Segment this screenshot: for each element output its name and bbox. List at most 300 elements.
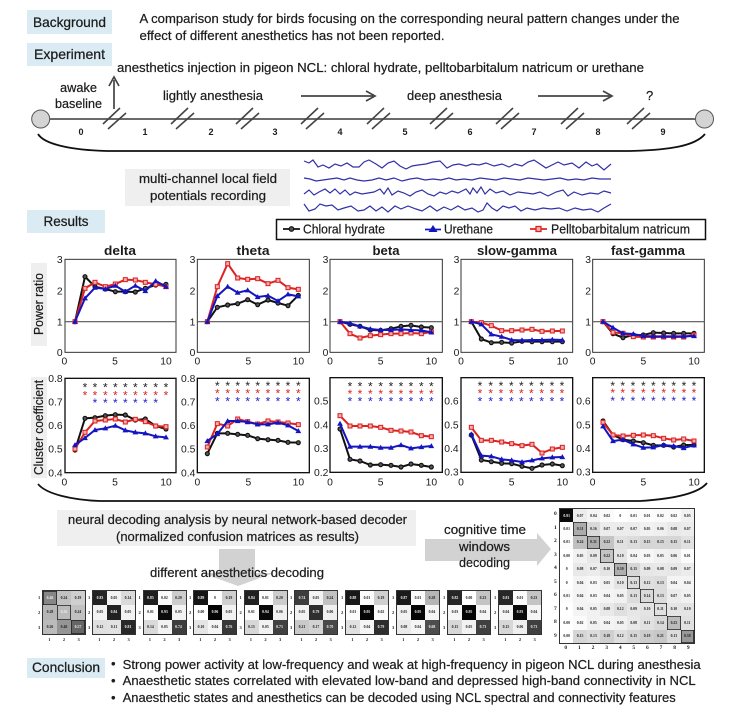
- arrow: injection up arrow: [109, 77, 119, 109]
- timeline: [32, 80, 713, 137]
- text block: conclusions: •: [111, 673, 116, 688]
- heading: Experiment: Experiment: [34, 46, 105, 62]
- heading: Background: Background: [33, 14, 106, 30]
- confusion matrix 3: 3: [178, 637, 180, 642]
- band titles: [104, 243, 686, 258]
- band titles: fast-gamma: [611, 243, 686, 258]
- confusion matrix 6: 1: [290, 595, 292, 600]
- band titles: delta: [104, 243, 137, 258]
- chart: beta cluster: *********: [348, 395, 434, 409]
- text block: injection: anesthetics injection in pigeon NCL: chloral hydrate, pelltobarbitalum natricum or urethane: [117, 60, 644, 75]
- band titles: slow-gamma: [477, 243, 558, 258]
- confusion matrix: cognitive time windows: 0.15: [657, 540, 664, 544]
- confusion matrix 8: 0.87: [401, 596, 407, 600]
- confusion matrix: cognitive time windows: 0.02: [577, 621, 583, 625]
- confusion matrix 3: 0.20: [175, 596, 182, 600]
- confusion matrix: cognitive time windows: 0.05: [590, 607, 597, 611]
- confusion matrix: cognitive time windows: 0.13: [657, 594, 664, 598]
- confusion matrix 10: 0.04: [503, 610, 509, 614]
- confusion matrix 2: 0.05: [125, 610, 131, 614]
- confusion matrix 9: 0.95: [466, 610, 472, 614]
- label: cognitive time windows decoding: cognitive time: [444, 522, 526, 537]
- confusion matrix: cognitive time windows: 0.07: [684, 567, 691, 571]
- chart: beta power: 0: [323, 348, 329, 359]
- confusion matrix: cognitive time windows: 0.10: [684, 607, 691, 611]
- time window numbers: 2: [208, 127, 214, 137]
- confusion matrix 5: 2: [240, 610, 242, 615]
- confusion matrix: cognitive time windows: 0.00: [563, 634, 570, 638]
- y label: power ratio: [31, 263, 47, 346]
- confusion matrix: cognitive time windows: 0.30: [617, 567, 624, 571]
- chart: theta cluster: *********: [215, 395, 301, 409]
- confusion matrix 1: 0.19: [75, 596, 81, 600]
- confusion matrix 1: 0.26: [61, 610, 67, 614]
- confusion matrix: cognitive time windows: 5: [632, 645, 635, 651]
- chart: slow-gamma cluster: *********: [478, 387, 565, 401]
- chart: power ratio beta, slow and fast gamma: [323, 255, 704, 367]
- confusion matrix: cognitive time windows: 0.05: [644, 527, 650, 531]
- confusion matrix 1: 2: [38, 610, 40, 615]
- label: question mark: ?: [646, 88, 653, 103]
- chart: fast-gamma cluster: 5: [640, 477, 646, 488]
- confusion matrix: cognitive time windows: 0.04: [577, 581, 583, 585]
- chart: slow-gamma cluster: *********: [478, 395, 565, 409]
- confusion matrix: cognitive time windows: 6: [646, 645, 649, 651]
- confusion matrix 4: 0.10: [198, 625, 204, 629]
- confusion matrix 3: 3: [138, 625, 141, 630]
- confusion matrix 1: 0.24: [75, 610, 81, 614]
- confusion matrix 8: 0.08: [401, 625, 407, 629]
- time window numbers: 3: [272, 127, 278, 137]
- confusion matrix 8: 0.68: [429, 625, 435, 629]
- confusion matrix: cognitive time windows: 0.04: [577, 594, 583, 598]
- confusion matrix 4: 0.00: [198, 610, 204, 614]
- chart: delta cluster: *********: [83, 388, 169, 402]
- confusion matrix: cognitive time windows: 0.04: [577, 607, 583, 611]
- confusion matrix 5: 0.84: [248, 596, 255, 600]
- chart: delta power: 5: [112, 356, 118, 367]
- confusion matrix: cognitive time windows: 0.07: [617, 527, 624, 531]
- confusion matrix: cognitive time windows: 0.04: [604, 621, 610, 625]
- confusion matrix: cognitive time windows: 0.10: [617, 581, 624, 585]
- chart: beta power: [323, 255, 442, 367]
- chart: delta power: 1: [57, 317, 63, 328]
- chart: theta cluster: 10: [293, 477, 304, 488]
- confusion matrix 4: 0.89: [198, 596, 204, 600]
- confusion matrix 10: 0.81: [503, 596, 509, 600]
- confusion matrix: cognitive time windows: 0.07: [590, 567, 597, 571]
- confusion matrix 8: 0.95: [415, 610, 421, 614]
- confusion matrix 5: [240, 590, 288, 642]
- chart: cluster coefficient delta and theta: [48, 374, 309, 488]
- time window numbers: [78, 127, 666, 137]
- confusion matrix: cognitive time windows: 0.09: [644, 567, 650, 571]
- chart: beta power: 10: [426, 356, 437, 367]
- chart: beta cluster: *********: [348, 387, 434, 401]
- chart: delta cluster: 0.4: [48, 469, 63, 480]
- confusion matrix 7: 1: [341, 595, 343, 600]
- label: deep anesthesia: deep anesthesia: [407, 88, 503, 103]
- chart: fast-gamma cluster: 0.4: [576, 444, 591, 455]
- confusion matrix 8: [392, 590, 440, 642]
- confusion matrix 6: 2: [290, 610, 292, 615]
- confusion matrix 10: 0.04: [531, 610, 537, 614]
- confusion matrix 4: 3: [229, 637, 231, 642]
- confusion matrix 2: 2: [88, 610, 90, 615]
- confusion matrix: cognitive time windows: 0.11: [644, 621, 650, 625]
- start and end nodes: [32, 110, 713, 128]
- confusion matrix: cognitive time windows: 0.15: [630, 634, 637, 638]
- bracket under timeline: [38, 134, 705, 151]
- label: multi-channel LFP: multi-channel local field: [139, 171, 277, 186]
- confusion matrix 6: [290, 590, 338, 642]
- confusion matrix 3: 0.85: [147, 596, 154, 600]
- confusion matrix 7: 0.12: [350, 625, 356, 629]
- chart: beta cluster: 0.2: [314, 468, 329, 479]
- chart: beta cluster: 0.4: [314, 421, 329, 432]
- confusion matrix 2: 2: [113, 637, 115, 642]
- confusion matrix 5: 1: [250, 637, 252, 642]
- confusion matrix: cognitive time windows: 0.01: [563, 594, 570, 598]
- confusion matrix 2: 0.84: [111, 610, 117, 614]
- legend item: chloral hydrate: Chloral hydrate: [303, 222, 385, 236]
- confusion matrix 7: 3: [341, 625, 343, 630]
- confusion matrix 9: 3: [443, 625, 445, 630]
- heading: Results: Results: [44, 213, 88, 229]
- confusion matrix 7: 0.79: [378, 625, 384, 629]
- confusion matrix 10: 1: [494, 595, 496, 600]
- confusion matrix 8: 0.04: [429, 610, 435, 614]
- chart: fast-gamma cluster: 0.3: [576, 467, 591, 478]
- label: cognitive time windows decoding: decoding: [459, 555, 510, 570]
- chart: slow-gamma power: 0: [458, 356, 464, 367]
- confusion matrix: cognitive time windows: 2: [554, 538, 557, 544]
- confusion matrix: cognitive time windows: 0: [566, 567, 568, 571]
- confusion matrix: cognitive time windows: 0.14: [644, 594, 650, 598]
- confusion matrix: cognitive time windows: 0.14: [657, 621, 664, 625]
- confusion matrix 1: 2: [63, 637, 65, 642]
- confusion matrix 2: [88, 590, 136, 642]
- confusion matrix 9: 1: [453, 637, 455, 642]
- chart: slow-gamma power: 2: [454, 286, 460, 297]
- chart: theta power: [190, 255, 309, 367]
- chart: slow-gamma power: 0: [454, 348, 460, 359]
- confusion matrix 6: 3: [330, 637, 332, 642]
- confusion matrix 5: 2: [264, 637, 267, 642]
- confusion matrix 2: 0.11: [111, 625, 117, 629]
- confusion matrix 9: 0.23: [480, 596, 486, 600]
- confusion matrix 5: 0.15: [248, 625, 255, 629]
- chart: delta power: 0: [57, 348, 63, 359]
- confusion matrix 6: 0.05: [313, 596, 319, 600]
- chart: slow-gamma power: 3: [454, 255, 460, 266]
- confusion matrix: cognitive time windows: 0.06: [657, 527, 664, 531]
- chart: theta cluster: 0: [194, 477, 200, 488]
- confusion matrix 6: 3: [290, 625, 292, 630]
- confusion matrix: cognitive time windows: 0.05: [577, 554, 583, 558]
- confusion matrix: cognitive time windows: 0.08: [577, 567, 583, 571]
- confusion matrix 2: 3: [128, 637, 130, 642]
- confusion matrix: cognitive time windows: 0.01: [630, 514, 637, 518]
- chart: delta power: 2: [57, 286, 63, 297]
- confusion matrix 2: 1: [98, 637, 100, 642]
- chart: slow-gamma power: [454, 255, 573, 367]
- confusion matrix 10: 0.01: [517, 596, 523, 600]
- confusion matrix: cognitive time windows: 0.05: [604, 581, 610, 585]
- chart: slow-gamma cluster: 0.3: [444, 467, 459, 478]
- chart: fast-gamma power: 1: [585, 317, 591, 328]
- confusion matrix 8: 2: [392, 610, 394, 615]
- confusion matrix: cognitive time windows: 0.21: [657, 634, 664, 638]
- confusion matrix: cognitive time windows: 0.01: [563, 527, 570, 531]
- confusion matrix 7: 0.01: [364, 596, 370, 600]
- chart: fast-gamma cluster: *********: [610, 394, 697, 408]
- confusion matrix 1: 0.26: [47, 625, 53, 629]
- confusion matrix 3: [138, 590, 187, 642]
- confusion matrix 2: 3: [88, 625, 90, 630]
- chart: delta power: 3: [57, 255, 63, 266]
- confusion matrix 4: 3: [189, 625, 191, 630]
- confusion matrix 5: 3: [279, 637, 281, 642]
- chart: slow-gamma power: 1: [454, 317, 460, 328]
- confusion matrix 10: 0.73: [531, 625, 537, 629]
- confusion matrix 4: 0.04: [212, 625, 218, 629]
- time window numbers: 6: [467, 127, 473, 137]
- chart: delta cluster: 0.6: [48, 421, 63, 432]
- chart: slow-gamma cluster: 0: [458, 477, 464, 488]
- confusion matrix 2: 0.81: [125, 625, 131, 629]
- confusion matrix: cognitive time windows: 0.91: [563, 514, 570, 518]
- confusion matrix 2: 0.12: [97, 625, 103, 629]
- confusion matrix: cognitive time windows: 0.07: [630, 527, 637, 531]
- confusion matrix 7: 0.01: [350, 610, 356, 614]
- confusion matrix 1: [38, 590, 86, 642]
- confusion matrix: cognitive time windows: [554, 508, 695, 651]
- confusion matrix 7: [341, 590, 389, 642]
- text block: conclusions: Anaesthetic states and anesthetics can be decoded using NCL spectral and connectivity features: [123, 690, 676, 705]
- confusion matrix 9: [443, 590, 491, 642]
- confusion matrix: cognitive time windows: 0.25: [671, 621, 677, 625]
- time window numbers: 7: [531, 127, 537, 137]
- confusion matrix 9: 0.00: [466, 596, 472, 600]
- confusion matrix: cognitive time windows: 0: [566, 607, 568, 611]
- chart: cluster coefficient beta, slow and fast gamma: [314, 378, 704, 488]
- y label: power ratio: Power ratio: [32, 273, 46, 335]
- heading: Experiment: [27, 43, 112, 66]
- confusion matrix 10: 0.93: [517, 610, 523, 614]
- label: neural decoding analysis: (normalized confusion matrices as results): [116, 529, 359, 544]
- chart: delta cluster: *********: [83, 380, 169, 394]
- confusion matrix: cognitive time windows: 0.05: [590, 621, 597, 625]
- confusion matrix 8: 3: [392, 625, 394, 630]
- confusion matrix 10: 2: [519, 637, 521, 642]
- confusion matrix: cognitive time windows: 0.10: [644, 607, 650, 611]
- confusion matrix 6: 0.21: [299, 625, 305, 629]
- confusion matrix 6: 2: [315, 637, 317, 642]
- confusion matrix: cognitive time windows: 0.08: [630, 621, 637, 625]
- chart: fast-gamma cluster: 0.6: [576, 397, 591, 408]
- chart: fast-gamma power: 10: [688, 356, 700, 367]
- confusion matrix 9: 3: [483, 637, 485, 642]
- chart: fast-gamma cluster: 0: [590, 477, 596, 488]
- chart: theta power: 2: [190, 286, 196, 297]
- confusion matrix 3: 0.05: [161, 625, 168, 629]
- confusion matrix: cognitive time windows: 0.05: [684, 514, 691, 518]
- chart: power ratio delta and theta: [57, 255, 309, 367]
- bracket under results: [38, 483, 707, 501]
- confusion matrix 4: 1: [189, 595, 191, 600]
- confusion matrix 8: 0.28: [429, 596, 435, 600]
- confusion matrix: cognitive time windows: 0.16: [590, 527, 597, 531]
- chart: slow-gamma cluster: [444, 378, 573, 488]
- confusion matrix 6: 0.24: [327, 596, 333, 600]
- confusion matrix 3: 1: [138, 595, 141, 600]
- y label: cluster coefficient: Cluster coefficient: [32, 379, 46, 475]
- text block: conclusions: •: [111, 656, 116, 671]
- confusion matrix 5: 0.01: [262, 596, 269, 600]
- chart: delta cluster: 10: [160, 477, 172, 488]
- confusion matrix 9: 0.03: [452, 610, 458, 614]
- confusion matrix: cognitive time windows: 2: [592, 645, 594, 651]
- chart: theta cluster: 0.7: [181, 397, 196, 408]
- chart: delta cluster: 0.5: [48, 445, 63, 456]
- confusion matrix: cognitive time windows: 0.03: [590, 594, 597, 598]
- confusion matrix: cognitive time windows: 9: [687, 645, 690, 651]
- chart: theta power: 0: [190, 348, 196, 359]
- confusion matrix 4: 0.76: [226, 625, 232, 629]
- time window numbers: 0: [78, 127, 84, 137]
- label: awake baseline: baseline: [55, 96, 102, 111]
- confusion matrix: cognitive time windows: 6: [554, 592, 557, 598]
- confusion matrix: cognitive time windows: 0.05: [684, 594, 691, 598]
- confusion matrix: cognitive time windows: 3: [605, 645, 608, 651]
- chart: beta power: 1: [323, 317, 329, 328]
- chart: theta power: 5: [245, 356, 251, 367]
- heading: Results: [27, 210, 105, 233]
- confusion matrix 3: 2: [138, 610, 141, 615]
- confusion matrix 1: 0.24: [61, 596, 67, 600]
- confusion matrix: cognitive time windows: 8: [554, 619, 557, 625]
- chart: beta cluster: 0.5: [314, 397, 329, 408]
- confusion matrix: cognitive time windows: 1: [578, 645, 581, 651]
- confusion matrix 3: 0.01: [147, 610, 154, 614]
- confusion matrix 1: 1: [38, 595, 40, 600]
- chart: beta power: 2: [323, 286, 329, 297]
- chart: fast-gamma power: 0: [590, 356, 596, 367]
- time window numbers: 5: [402, 127, 408, 137]
- confusion matrix 10: 0.15: [503, 625, 509, 629]
- confusion matrix 10: 0.23: [531, 596, 537, 600]
- chart: theta power: 3: [190, 255, 196, 266]
- confusion matrix: cognitive time windows: 0.09: [590, 554, 597, 558]
- arrow: right to time windows matrix: [425, 533, 551, 566]
- confusion matrix: cognitive time windows: 0.31: [590, 540, 597, 544]
- confusion matrix 8: 1: [402, 637, 404, 642]
- confusion matrix 7: 0.95: [364, 610, 370, 614]
- confusion matrix 7: 2: [366, 637, 368, 642]
- confusion matrix 2: 1: [88, 595, 90, 600]
- confusion matrix: cognitive time windows: 0.15: [644, 540, 650, 544]
- confusion matrix 1: 3: [38, 625, 40, 630]
- chart: delta power: 10: [160, 356, 172, 367]
- chart: beta cluster: 10: [426, 477, 437, 488]
- confusion matrix: cognitive time windows: 1: [554, 524, 557, 530]
- confusion matrix 4: 0.19: [226, 596, 232, 600]
- confusion matrix: cognitive time windows: 0.03: [644, 554, 650, 558]
- confusion matrix 4: 2: [189, 610, 191, 615]
- confusion matrix: cognitive time windows: 0.08: [671, 527, 677, 531]
- confusion matrix 9: 0.04: [480, 610, 486, 614]
- chart: theta power: 10: [293, 356, 304, 367]
- chart: beta power: 0: [327, 356, 333, 367]
- text block: conclusions: Strong power activity at low-frequency and weak at high-frequency in pigeon NCL during anesthesia: [123, 657, 701, 672]
- confusion matrix 9: 0.15: [452, 625, 458, 629]
- confusion matrix 4: 2: [214, 637, 216, 642]
- confusion matrix 3: 1: [149, 637, 151, 642]
- confusion matrix 8: 1: [392, 595, 394, 600]
- confusion matrix 7: 0.02: [378, 610, 384, 614]
- confusion matrix: cognitive time windows: 0.05: [617, 594, 624, 598]
- confusion matrix: cognitive time windows: 0.15: [671, 540, 677, 544]
- confusion matrix 10: 0.06: [517, 625, 523, 629]
- label: cognitive time windows decoding: [444, 522, 526, 570]
- confusion matrix: cognitive time windows: 0.10: [604, 567, 610, 571]
- chart: slow-gamma cluster: 0.6: [444, 397, 459, 408]
- confusion matrix 5: 0.05: [262, 625, 269, 629]
- text block: conclusions: •: [111, 690, 116, 705]
- chart: beta power: 3: [323, 255, 329, 266]
- confusion matrix: cognitive time windows: 0.03: [590, 581, 597, 585]
- confusion matrix 1: 0.40: [61, 625, 67, 629]
- confusion matrix: cognitive time windows: 0.07: [604, 527, 610, 531]
- label: multi-channel LFP: potentials recording: [150, 188, 266, 203]
- label: lightly anesthesia: lightly anesthesia: [163, 88, 264, 103]
- chart: slow-gamma cluster: 0.5: [444, 421, 459, 432]
- time window numbers: 9: [660, 127, 666, 137]
- confusion matrix: cognitive time windows: 7: [660, 645, 662, 651]
- confusion matrix 8: 0.04: [415, 625, 421, 629]
- confusion matrix 1: 0.57: [75, 625, 81, 629]
- confusion matrix: cognitive time windows: 0.02: [671, 514, 677, 518]
- label: neural decoding analysis: [57, 510, 416, 546]
- label: awake baseline: [55, 80, 102, 111]
- confusion matrix: cognitive time windows: 0.10: [617, 554, 624, 558]
- confusion matrix 5: 1: [240, 595, 242, 600]
- confusion matrix: cognitive time windows: 9: [554, 632, 557, 638]
- confusion matrix 4: 0.96: [212, 610, 218, 614]
- confusion matrix 9: 2: [443, 610, 445, 615]
- chart: delta power: 0: [61, 356, 67, 367]
- confusion matrix: cognitive time windows: 0.09: [630, 607, 637, 611]
- confusion matrix: cognitive time windows: 0.11: [684, 621, 690, 625]
- confusion matrix 5: 0.20: [276, 596, 283, 600]
- confusion matrix 10: 3: [534, 637, 536, 642]
- confusion matrix: cognitive time windows: 0.01: [644, 514, 650, 518]
- confusion matrix 6: 1: [300, 637, 302, 642]
- chart: fast-gamma power: 5: [640, 356, 646, 367]
- confusion matrix 6: 0.74: [299, 596, 305, 600]
- chart: delta cluster: 0.7: [48, 397, 63, 408]
- confusion matrix 10: 2: [494, 610, 496, 615]
- confusion matrix: cognitive time windows: 0.02: [604, 514, 610, 518]
- confusion matrix 3: 0.74: [175, 625, 182, 629]
- chart: theta cluster: 0.6: [181, 421, 196, 432]
- text block: conclusions: [111, 656, 701, 705]
- chart: delta cluster: 0.8: [48, 374, 63, 385]
- confusion matrix 3: 0.93: [161, 610, 168, 614]
- confusion matrix 7: 0.88: [350, 596, 356, 600]
- confusion matrix: cognitive time windows: 0.13: [630, 581, 637, 585]
